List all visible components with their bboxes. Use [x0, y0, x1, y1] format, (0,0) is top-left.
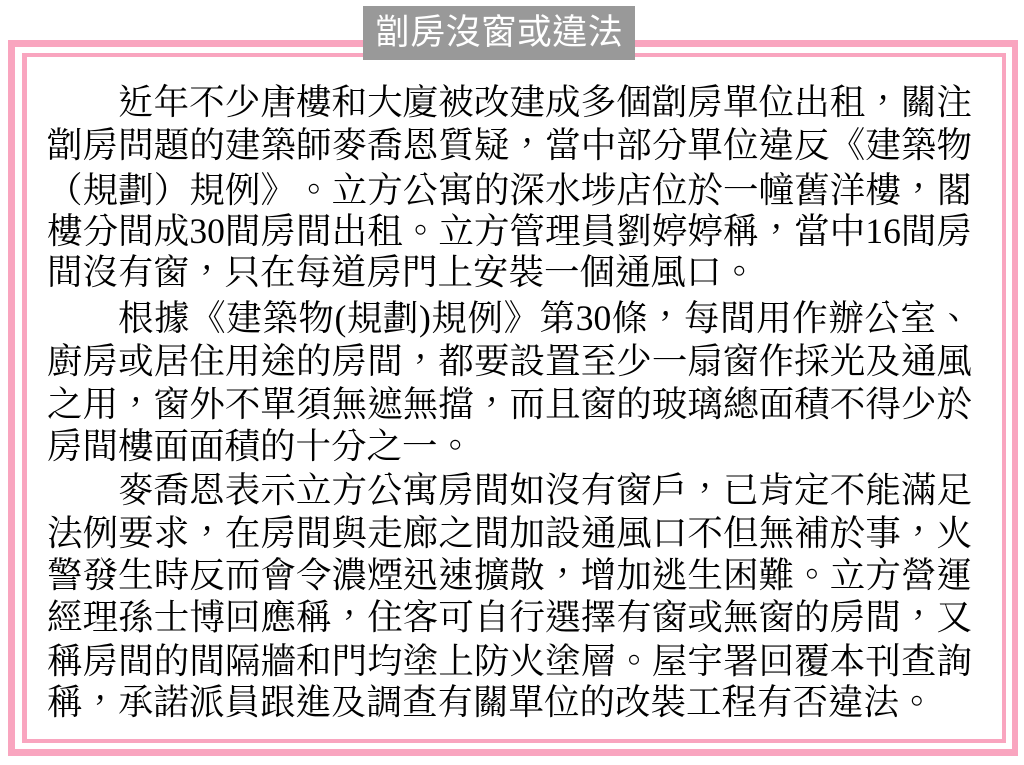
paragraph 2: 根據《建築物(規劃)規例》第30條，每間用作辦公室、 — [118, 298, 972, 338]
paragraph 2 — [47, 298, 972, 466]
paragraph 1: （規劃）規例》。立方公寓的深水埗店位於一幢舊洋樓，閣 — [47, 170, 972, 210]
paragraph 1: 近年不少唐樓和大廈被改建成多個劏房單位出租，關注 — [118, 82, 972, 122]
paragraph 3: 麥喬恩表示立方公寓房間如沒有窗戶，已肯定不能滿足 — [118, 470, 972, 510]
paragraph 1: 間沒有窗，只在每道房門上安裝一個通風口。 — [47, 252, 757, 292]
paragraph 1 — [47, 82, 972, 292]
paragraph 3: 警發生時反而會令濃煙迅速擴散，增加逃生困難。立方營運 — [47, 555, 972, 595]
paragraph 3: 法例要求，在房間與走廊之間加設通風口不但無補於事，火 — [47, 513, 972, 553]
paragraph 1: 劏房問題的建築師麥喬恩質疑，當中部分單位違反《建築物 — [47, 125, 972, 165]
paragraph 2: 之用，窗外不單須無遮無擋，而且窗的玻璃總面積不得少於 — [47, 384, 972, 424]
paragraph 3: 稱房間的間隔牆和門均塗上防火塗層。屋宇署回覆本刊查詢 — [47, 641, 972, 681]
paragraph 3 — [47, 470, 972, 722]
title — [363, 6, 635, 60]
title: 劏房沒窗或違法 — [375, 13, 623, 52]
paragraph 1: 樓分間成30間房間出租。立方管理員劉婷婷稱，當中16間房 — [47, 211, 972, 251]
paragraph 2: 廚房或居住用途的房間，都要設置至少一扇窗作採光及通風 — [47, 341, 972, 381]
paragraph 2: 房間樓面面積的十分之一。 — [47, 426, 473, 466]
paragraph 3: 稱，承諾派員跟進及調查有關單位的改裝工程有否違法。 — [47, 682, 935, 722]
paragraph 3: 經理孫士博回應稱，住客可自行選擇有窗或無窗的房間，又 — [47, 597, 972, 637]
